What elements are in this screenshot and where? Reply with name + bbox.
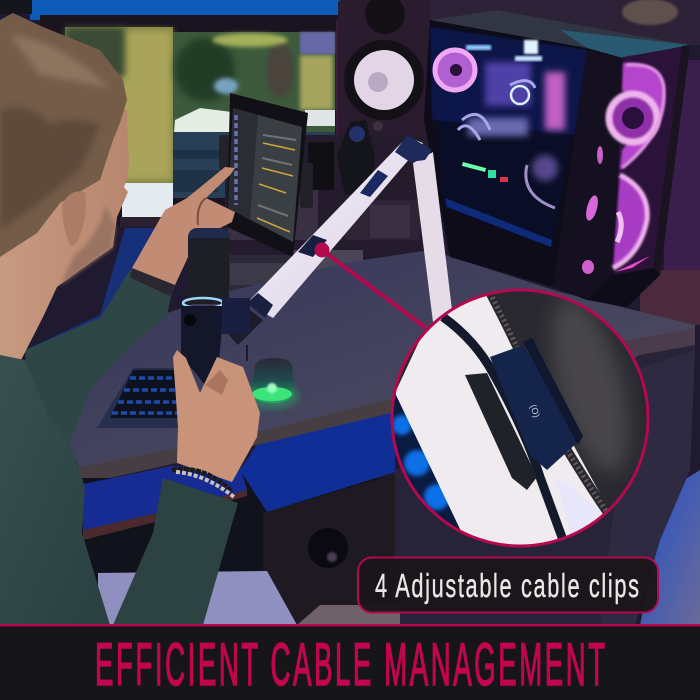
glass <box>430 27 587 248</box>
figurine on shelf <box>622 0 678 25</box>
man: neck and head <box>0 13 129 362</box>
monitor: top strip <box>30 0 342 20</box>
ear <box>62 191 86 246</box>
clip logo: (O) <box>528 403 542 419</box>
monitor: right window <box>173 32 335 132</box>
interior glow <box>485 62 531 106</box>
blue shelf behind arm <box>25 228 175 380</box>
PC case <box>424 10 690 307</box>
right blue panel <box>240 412 395 512</box>
keyboard <box>97 368 178 428</box>
bracelet <box>172 469 234 497</box>
lens: braided cable <box>490 293 607 512</box>
desk cabinet and under-desk <box>80 345 695 625</box>
lens: black cable <box>443 317 563 540</box>
man: torso <box>0 355 110 625</box>
desk front edge <box>76 398 395 484</box>
mouse <box>245 358 299 409</box>
microphone <box>181 228 250 385</box>
lens: blue glow <box>394 394 460 530</box>
tablet <box>227 93 308 257</box>
subwoofer <box>263 474 395 625</box>
right cabinet <box>395 345 695 625</box>
front mesh <box>613 47 682 275</box>
man: forearm <box>113 478 238 625</box>
boom arm rear <box>413 152 452 322</box>
hand holding mic <box>173 350 260 482</box>
pants <box>98 571 297 625</box>
front fan bottom <box>613 175 647 268</box>
pointer line <box>314 242 426 328</box>
monitor: left window <box>65 27 173 187</box>
tablet mount <box>219 120 375 208</box>
gear below monitor <box>225 135 430 291</box>
speaker <box>338 0 430 136</box>
monitor: UI panel <box>173 132 235 198</box>
GPU lights <box>462 162 486 172</box>
boom arm front <box>227 135 432 345</box>
watch <box>129 263 177 296</box>
front column <box>553 50 623 300</box>
panel: magnified cable clip lens <box>380 290 648 555</box>
footer band <box>0 624 700 700</box>
title: EFFICIENT CABLE MANAGEMENT <box>95 631 605 698</box>
front fan top <box>620 63 665 170</box>
lens: white arm <box>395 292 610 550</box>
lens: clip <box>465 373 537 490</box>
hand pointing at tablet <box>132 167 235 285</box>
man: arm sleeve <box>25 270 173 443</box>
desk surface <box>60 250 695 470</box>
lens: dark background <box>546 298 634 475</box>
label pill <box>358 558 658 612</box>
label pill: 4 Adjustable cable clips <box>375 567 639 604</box>
top face <box>430 10 690 58</box>
audio interface <box>226 255 294 291</box>
tubes <box>458 81 535 140</box>
left blue shelf <box>83 466 247 533</box>
monitor <box>40 15 345 227</box>
side vents <box>597 146 603 164</box>
left fan <box>435 50 475 90</box>
